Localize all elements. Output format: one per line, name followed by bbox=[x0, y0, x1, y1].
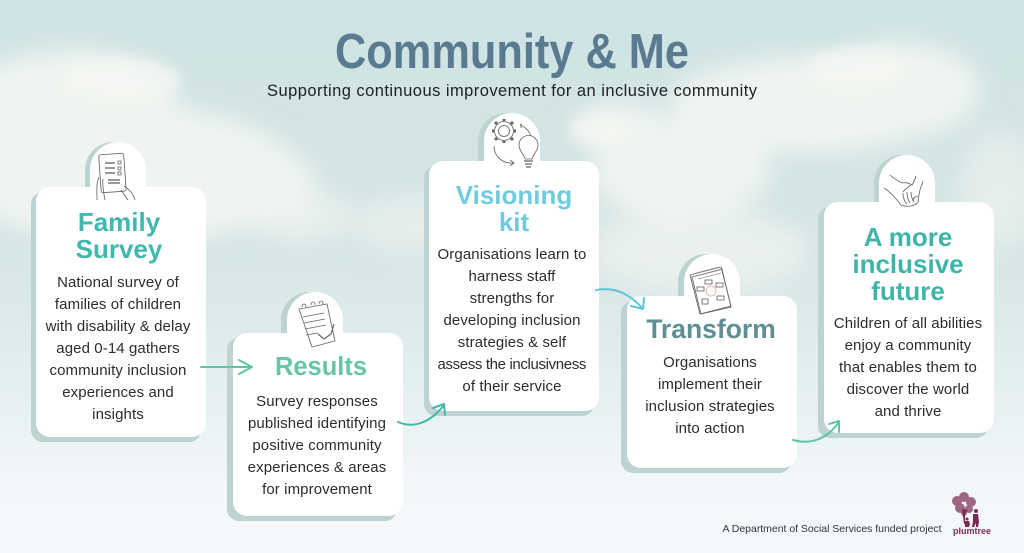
text: family survey description: insights bbox=[92, 406, 144, 423]
text: family survey description bbox=[45, 274, 191, 423]
text: transform description: into action bbox=[675, 420, 745, 437]
text: visioning kit description: harness staff bbox=[469, 268, 556, 285]
text: visioning kit description: of their service bbox=[462, 378, 562, 395]
title: Community & Me bbox=[335, 25, 689, 79]
text: family survey description: families of children bbox=[55, 296, 181, 313]
text: visioning kit description: strategies & self bbox=[458, 334, 567, 351]
text: results description: published identifying bbox=[248, 415, 386, 432]
heading: family survey: Survey bbox=[76, 234, 163, 264]
text: visioning kit description: Organisations learn to bbox=[438, 246, 586, 263]
text: visioning kit description bbox=[438, 246, 586, 395]
arrow: family survey to results bbox=[201, 360, 252, 374]
funding note: A Department of Social Services funded project bbox=[722, 523, 942, 535]
icon: clipboard checklist bbox=[299, 301, 335, 347]
heading: a more inclusive future: future bbox=[871, 276, 945, 306]
text: family survey description: with disability & delay bbox=[45, 318, 191, 335]
icon: document flowchart bbox=[690, 267, 731, 314]
heading: a more inclusive future bbox=[852, 222, 964, 306]
text: transform description: implement their bbox=[658, 376, 762, 393]
icon: gear and light bulb bbox=[492, 119, 538, 167]
arrow: results to visioning kit bbox=[398, 404, 445, 425]
text: a more inclusive future description: Children of all abilities bbox=[834, 315, 982, 332]
heading: transform: Transform bbox=[646, 314, 776, 344]
text: results description: experiences & areas bbox=[248, 459, 386, 476]
text: a more inclusive future description: and thrive bbox=[875, 403, 941, 420]
text: a more inclusive future description: enjoy a community bbox=[845, 337, 972, 354]
text: transform description bbox=[645, 354, 775, 437]
text: family survey description: National survey of bbox=[57, 274, 180, 291]
heading: a more inclusive future: inclusive bbox=[852, 249, 964, 279]
subtitle: Supporting continuous improvement for an inclusive community bbox=[267, 82, 758, 100]
text: a more inclusive future description bbox=[834, 315, 982, 420]
heading: family survey: Family bbox=[78, 207, 161, 237]
text: family survey description: experiences and bbox=[62, 384, 174, 401]
arrow: transform to inclusive future bbox=[793, 421, 839, 442]
panel: transform bbox=[621, 254, 797, 473]
text: transform description: inclusion strategies bbox=[645, 398, 775, 415]
text: family survey description: aged 0-14 gathers bbox=[56, 340, 180, 357]
heading: results: Results bbox=[275, 353, 367, 381]
heading: visioning kit: Visioning bbox=[456, 180, 572, 210]
text: results description: for improvement bbox=[262, 481, 373, 498]
heading: visioning kit: kit bbox=[499, 207, 530, 237]
panel: visioning kit bbox=[424, 113, 599, 416]
text: a more inclusive future description: discover the world bbox=[847, 381, 969, 398]
icon: tablet survey bbox=[97, 153, 135, 200]
heading: visioning kit bbox=[456, 180, 572, 237]
logo: plumtree bbox=[952, 492, 991, 536]
heading: a more inclusive future: A more bbox=[864, 222, 952, 252]
text: results description bbox=[248, 393, 386, 498]
text: visioning kit description: assess the inclusivness bbox=[438, 356, 586, 373]
text: transform description: Organisations bbox=[663, 354, 757, 371]
panel: a more inclusive future bbox=[818, 155, 994, 438]
heading: family survey bbox=[76, 207, 163, 264]
icon: holding hands bbox=[884, 175, 923, 206]
text: visioning kit description: developing inclusion bbox=[443, 312, 581, 329]
text: results description: Survey responses bbox=[256, 393, 378, 410]
logo: plumtree: plumtree bbox=[953, 526, 991, 536]
panel: family survey bbox=[31, 142, 206, 442]
panel: results bbox=[227, 292, 403, 521]
text: visioning kit description: strengths for bbox=[470, 290, 554, 307]
arrow: visioning kit to transform bbox=[596, 289, 644, 309]
text: a more inclusive future description: that enables them to bbox=[839, 359, 977, 376]
text: family survey description: community inclusion bbox=[50, 362, 186, 379]
text: results description: positive community bbox=[252, 437, 382, 454]
